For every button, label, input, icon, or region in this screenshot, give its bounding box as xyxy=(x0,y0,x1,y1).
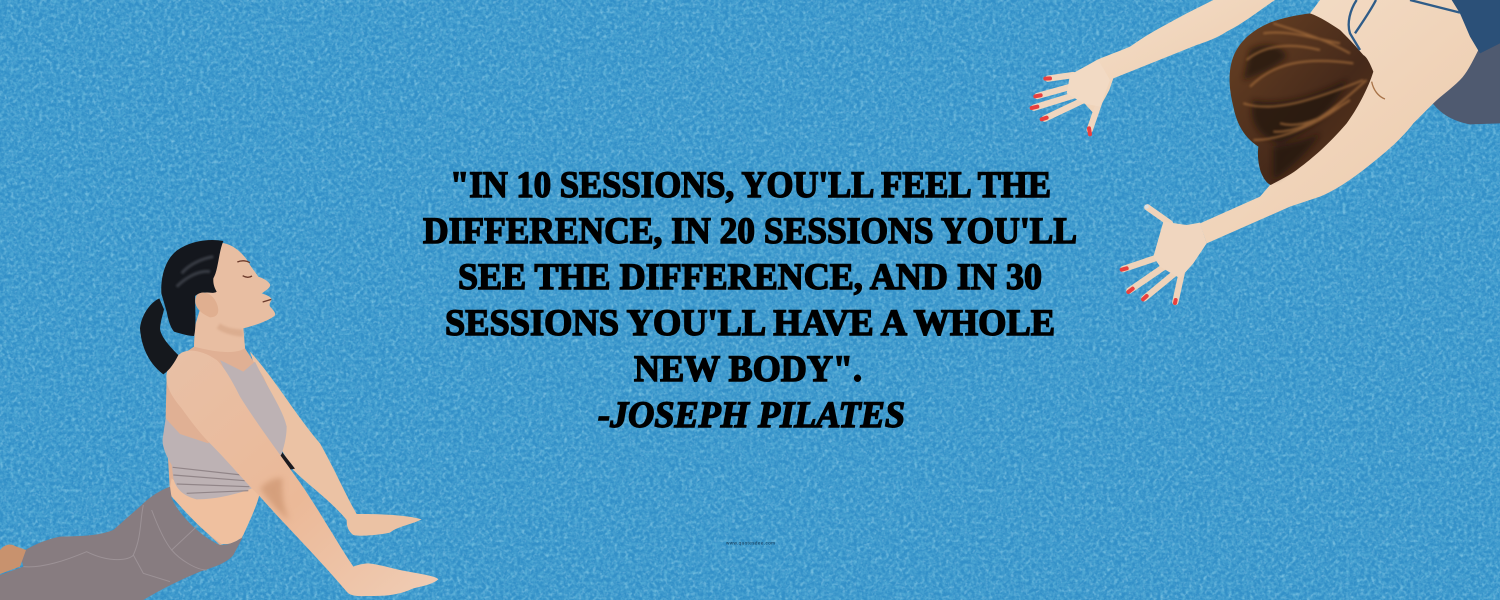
quote line 3: SEE THE DIFFERENCE, AND IN 30 xyxy=(458,257,1042,298)
far arm xyxy=(250,352,422,536)
leggings seams xyxy=(23,505,207,582)
website footer: www.quotesdee.com xyxy=(726,540,775,546)
bra hem stripes xyxy=(173,467,249,493)
belly xyxy=(170,478,259,544)
foot xyxy=(0,544,26,574)
red nails upper hand xyxy=(1032,78,1090,134)
hair xyxy=(161,240,223,336)
dark top xyxy=(1452,0,1500,53)
quote line 5: NEW BODY". xyxy=(634,349,862,390)
figure: woman in cobra pose xyxy=(0,240,438,600)
eye brow and lips xyxy=(237,261,271,302)
underarm crease xyxy=(1372,82,1385,99)
figure: woman reaching forward from above xyxy=(1032,0,1500,303)
quote line 4: SESSIONS YOU'LL HAVE A WHOLE xyxy=(445,303,1055,344)
sports bra xyxy=(163,360,287,499)
under chin shade xyxy=(217,323,243,337)
dark inner top xyxy=(279,452,295,470)
red nails lower hand xyxy=(1122,268,1176,303)
elbow shading xyxy=(260,478,290,520)
hair highlight xyxy=(177,257,213,287)
attribution: -JOSEPH PILATES xyxy=(598,395,905,436)
back and lower arm xyxy=(1200,0,1478,243)
lower hand palm xyxy=(1153,222,1207,278)
ear xyxy=(195,292,218,317)
quote xyxy=(423,165,1077,436)
long brown hair xyxy=(1230,13,1373,185)
quote line 2: DIFFERENCE, IN 20 SESSIONS YOU'LL xyxy=(423,211,1077,252)
quote line 1: "IN 10 SESSIONS, YOU'LL FEEL THE xyxy=(450,165,1051,206)
shorts xyxy=(1433,42,1500,124)
neck and torso xyxy=(166,327,287,545)
near arm xyxy=(166,351,438,596)
leggings xyxy=(0,487,243,600)
lower hand fingers xyxy=(1123,207,1182,302)
hair strands xyxy=(1243,23,1367,140)
ponytail xyxy=(140,298,178,374)
straps xyxy=(1349,0,1460,50)
face and neck xyxy=(194,243,275,352)
hair dark core xyxy=(1243,45,1347,180)
upper hand fingers xyxy=(1034,75,1100,130)
upper arm xyxy=(1070,0,1275,115)
thumb nail xyxy=(1145,205,1149,209)
upper hand palm xyxy=(1067,60,1110,107)
